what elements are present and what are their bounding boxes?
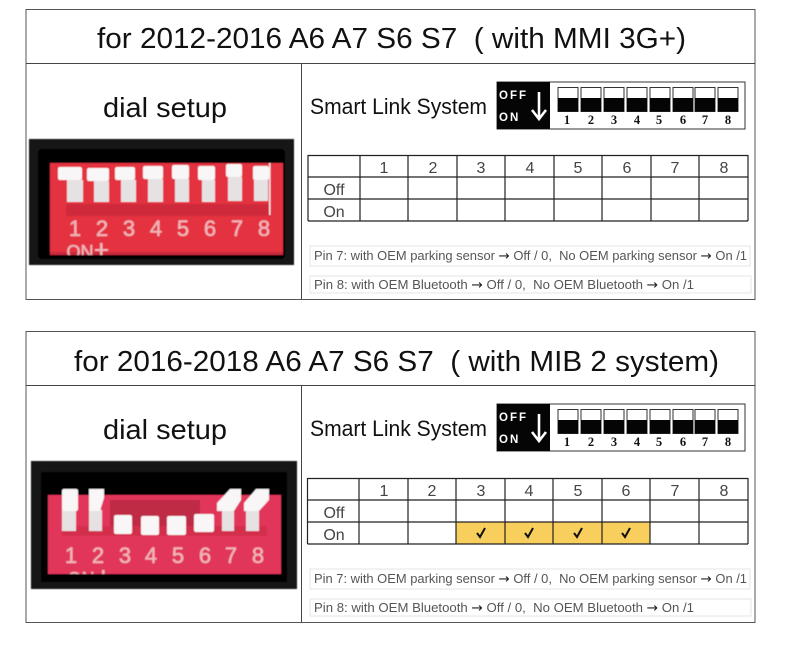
panel: 2016-2018 MIB 2	[26, 332, 755, 622]
note: pin 8: Pin 8: with OEM Bluetooth → Off / 0, No OEM Bluetooth → On /1	[314, 601, 694, 616]
photo: DIP switch 3-6 on: 7	[225, 543, 237, 568]
photo: DIP switch 3-6 on: ON	[68, 569, 94, 589]
table: pin settings: 3	[477, 160, 486, 177]
table: pin settings with 3-6 on: 1	[380, 483, 389, 500]
icon: DIP switch diagram: 6	[680, 435, 686, 449]
table: pin settings	[308, 155, 748, 221]
table: pin settings with 3-6 on: On	[323, 527, 345, 544]
note: pin 7: Pin 7: with OEM parking sensor → Off / 0, No OEM parking sensor → On /1	[314, 249, 747, 264]
icon: DIP switch diagram	[497, 404, 745, 451]
photo: DIP switch 3-6 on: 6	[199, 543, 211, 568]
table: pin settings with 3-6 on: 7	[671, 483, 680, 500]
table: pin settings with 3-6 on: 2	[428, 483, 437, 500]
photo: DIP switch all off: 8	[258, 216, 270, 241]
icon: DIP switch diagram: 2	[588, 435, 594, 449]
icon: DIP switch diagram: 4	[634, 435, 641, 449]
icon: DIP switch diagram: 6	[680, 113, 686, 127]
table: pin settings: Off	[323, 182, 345, 199]
table: pin settings: 2	[429, 160, 438, 177]
icon: DIP switch diagram: 2	[588, 113, 594, 127]
icon: DIP switch diagram: 5	[656, 435, 662, 449]
panel: 2012-2016 MMI 3G+	[26, 10, 755, 300]
icon: DIP switch diagram: 7	[702, 113, 708, 127]
checkmarks	[477, 528, 630, 537]
heading: 2016-2018: for 2016-2018 A6 A7 S6 S7 ( with MIB 2 system)	[74, 346, 719, 378]
photo: DIP switch 3-6 on: 3	[119, 543, 131, 568]
icon: DIP switch diagram: 3	[611, 113, 617, 127]
table: pin settings with 3-6 on: 3	[477, 483, 486, 500]
photo: DIP switch all off: 5	[177, 216, 189, 241]
photo: DIP switch 3-6 on: 1	[65, 543, 77, 568]
table: pin settings with 3-6 on: Off	[323, 505, 345, 522]
icon: DIP switch diagram: 8	[725, 435, 731, 449]
photo: DIP switch 3-6 on: 4	[145, 543, 157, 568]
photo: DIP switch 3-6 on	[31, 461, 297, 589]
icon: DIP switch diagram: 3	[611, 435, 617, 449]
photo: DIP switch all off: 6	[204, 216, 216, 241]
table: pin settings: 8	[720, 160, 729, 177]
table: pin settings: 4	[526, 160, 535, 177]
icon: DIP switch diagram: 7	[702, 435, 708, 449]
icon: DIP switch diagram: 5	[656, 113, 662, 127]
table: pin settings with 3-6 on: 6	[622, 483, 631, 500]
icon: DIP switch diagram: OFF	[499, 90, 528, 102]
icon: DIP switch diagram: 1	[564, 113, 570, 127]
photo: DIP switch 3-6 on: 5	[172, 543, 184, 568]
heading: 2012-2016: for 2012-2016 A6 A7 S6 S7 ( with MMI 3G+)	[97, 23, 686, 55]
table: pin settings with 3-6 on: 5	[574, 483, 583, 500]
photo: DIP switch all off: 1	[69, 216, 81, 241]
heading: dial setup: dial setup	[103, 92, 227, 123]
table: pin settings: 7	[671, 160, 680, 177]
icon: DIP switch diagram: 4	[634, 113, 641, 127]
table: pin settings: 1	[380, 160, 389, 177]
photo: DIP switch 3-6 on: 2	[92, 543, 104, 568]
photo: DIP switch all off: ON	[66, 242, 94, 262]
icon: DIP switch diagram: OFF	[499, 412, 528, 424]
icon: DIP switch diagram: 1	[564, 435, 570, 449]
label: Smart Link System: Smart Link System	[310, 416, 487, 441]
icon: DIP switch diagram: ON	[499, 434, 520, 446]
heading: dial setup: dial setup	[103, 414, 227, 445]
table: pin settings with 3-6 on: 8	[720, 483, 729, 500]
icon: DIP switch diagram: 8	[725, 113, 731, 127]
label: Smart Link System: Smart Link System	[310, 94, 487, 119]
photo: DIP switch 3-6 on: 8	[252, 543, 264, 568]
table: pin settings with 3-6 on	[308, 478, 748, 544]
photo: DIP switch all off: 3	[123, 216, 135, 241]
note: pin 7: Pin 7: with OEM parking sensor → Off / 0, No OEM parking sensor → On /1	[314, 572, 747, 587]
photo: DIP switch all off: 7	[231, 216, 243, 241]
photo: DIP switch all off: 4	[150, 216, 162, 241]
table: pin settings: 5	[574, 160, 583, 177]
note: pin 8: Pin 8: with OEM Bluetooth → Off / 0, No OEM Bluetooth → On /1	[314, 278, 694, 293]
table: pin settings with 3-6 on: 4	[525, 483, 534, 500]
photo: DIP switch all off	[29, 139, 294, 265]
table: pin settings: On	[323, 204, 345, 221]
icon: DIP switch diagram: ON	[499, 112, 520, 124]
icon: DIP switch diagram	[497, 82, 745, 129]
photo: DIP switch all off: 2	[96, 216, 108, 241]
table: pin settings: 6	[623, 160, 632, 177]
